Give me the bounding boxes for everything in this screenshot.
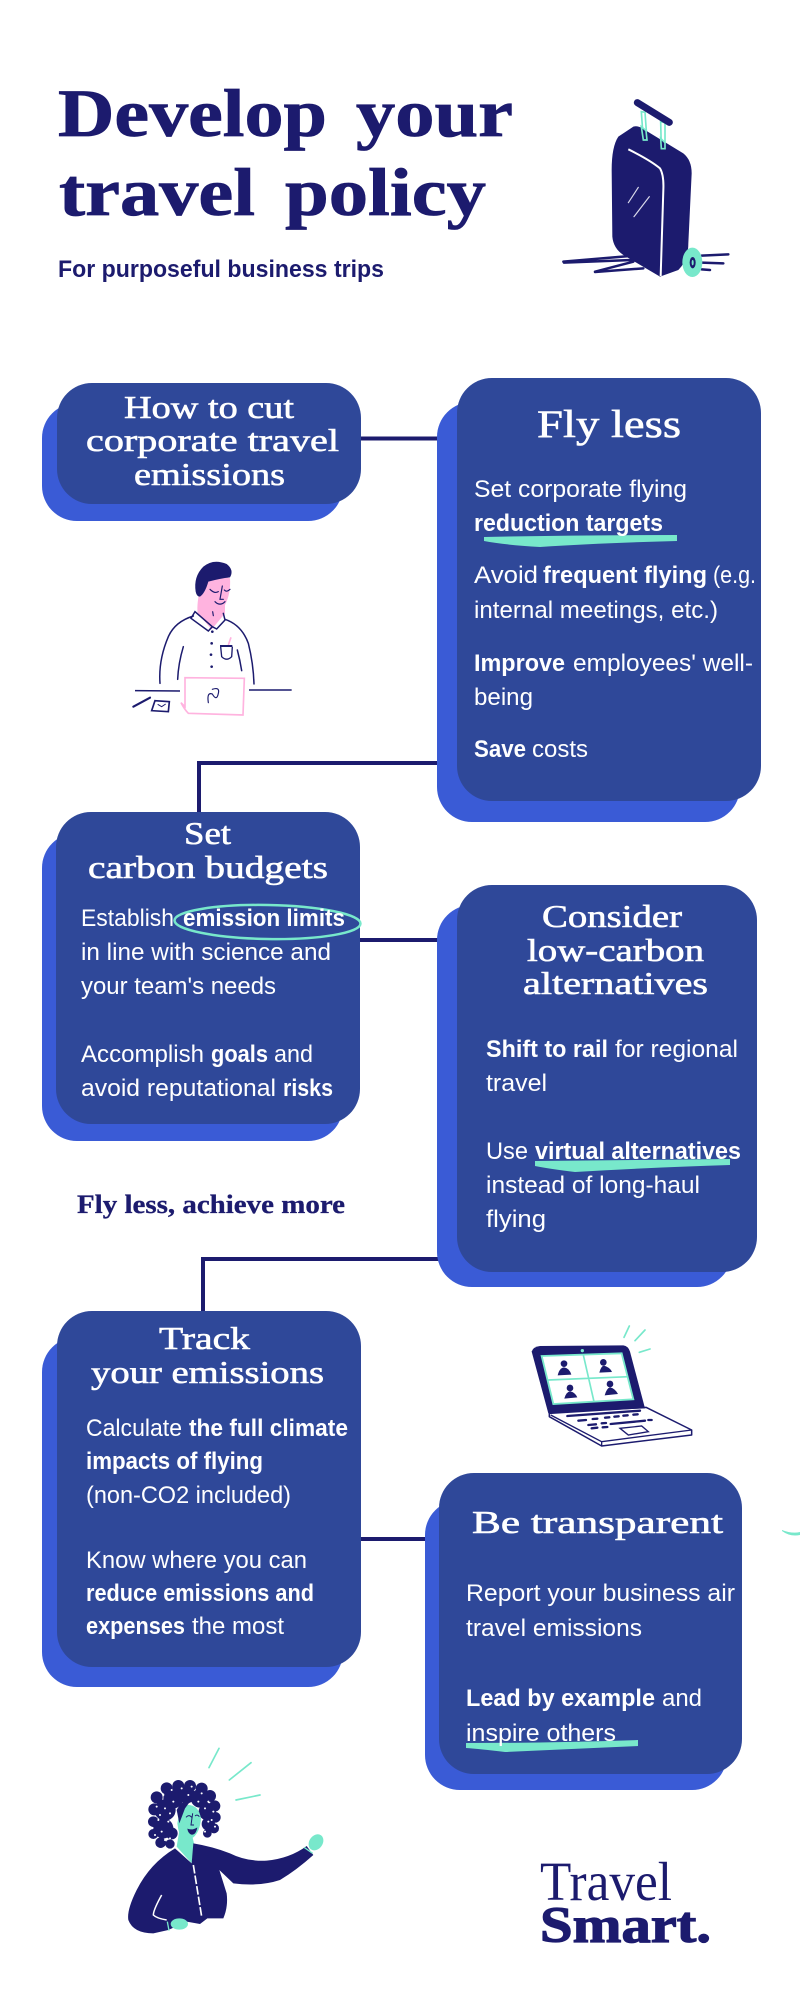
body text: track emissions: reduce emissions and [86,1580,314,1607]
body text: fly less: (e.g. [713,562,756,589]
icon: suitcase [563,103,728,277]
body text: alternatives: Use [486,1138,528,1165]
body text: carbon budgets: Establish [81,905,174,932]
body text: fly less [474,476,756,763]
connector: fly less to carbon budgets [199,763,440,815]
tagline: Fly less, achieve more [77,1190,345,1219]
body text: carbon budgets [81,905,345,1102]
panel: fly less [437,378,761,822]
heading: set carbon budgets: Set [184,815,231,851]
body text: alternatives: flying [486,1206,546,1233]
logo: Travel Smart: Smart. [540,1898,711,1954]
body text: track emissions: the full climate [189,1415,348,1442]
body text: carbon budgets: Accomplish [81,1041,204,1068]
subtitle: For purposeful business trips [58,256,384,283]
heading: how to cut corporate travel emissions [86,389,339,492]
body text: carbon budgets: risks [283,1075,333,1102]
illustration: woman waving [128,1748,326,1933]
title: policy [285,154,486,230]
body text: carbon budgets: in line with science and [81,939,331,966]
body text: track emissions: impacts of flying [86,1448,263,1475]
illustration: man at laptop [133,562,292,715]
logo: Travel Smart [540,1851,711,1954]
body text: fly less: employees' well- [573,650,753,677]
body text: fly less: Improve [474,650,565,677]
body text: be transparent: travel emissions [466,1615,642,1642]
highlight: reduction targets underline [484,535,677,547]
connector: track emissions to be transparent [359,1537,428,1541]
heading: consider low-carbon alternatives [523,898,708,1001]
body text: track emissions: Calculate [86,1415,182,1442]
heading: set carbon budgets [88,815,328,885]
body text: alternatives: travel [486,1070,547,1097]
body text: carbon budgets: emission limits [183,905,345,932]
heading: track your emissions [91,1320,324,1390]
logo: Travel Smart: Travel [540,1851,672,1912]
panel: set carbon budgets [42,812,361,1141]
heading: how to cut corporate travel emissions: corporate travel [86,422,339,458]
highlight: emission limits circle [174,903,361,941]
heading: track your emissions: your emissions [91,1354,324,1390]
heading: consider low-carbon alternatives: Consider [542,898,682,934]
body text: be transparent: Report your business air [466,1580,735,1607]
body text: track emissions [86,1415,348,1640]
body text: track emissions: (non-CO2 included) [86,1482,291,1509]
body text: fly less: reduction targets [474,510,663,537]
highlight: virtual alternatives underline [535,1159,730,1172]
body text: alternatives [486,1036,741,1233]
heading: be transparent: Be transparent [472,1504,723,1540]
body text: fly less: frequent flying [543,562,707,589]
body text: carbon budgets: goals [211,1041,268,1068]
connector: intro to fly less [361,436,440,440]
body text: be transparent: inspire others [466,1720,616,1747]
connector: carbon budgets to alternatives [358,938,440,942]
heading: how to cut corporate travel emissions: How to cut [124,389,294,425]
body text: fly less: Avoid [474,562,538,589]
illustration: laptop video call [532,1326,692,1446]
body text: be transparent: Lead by example [466,1685,655,1712]
heading: fly less: Fly less [537,403,681,446]
body text: be transparent: and [662,1685,702,1712]
title [58,75,513,230]
body text: be transparent [466,1580,735,1747]
body text: fly less: Set corporate flying [474,476,687,503]
body text: carbon budgets: avoid reputational [81,1075,276,1102]
body text: alternatives: for regional [615,1036,738,1063]
title: your [356,75,513,151]
panel: track your emissions [42,1311,361,1687]
body text: carbon budgets: and [274,1041,313,1068]
title: travel [59,154,255,230]
body text: fly less: costs [532,736,588,763]
body text: track emissions: Know where you can [86,1547,307,1574]
highlight: inspire others underline [466,1740,638,1752]
heading: consider low-carbon alternatives: low-carbon [527,932,704,968]
heading: set carbon budgets: carbon budgets [88,849,328,885]
heading: track your emissions: Track [159,1320,250,1356]
panel: be transparent [425,1473,742,1790]
body text: track emissions: expenses [86,1613,185,1640]
body text: track emissions: the most [192,1613,284,1640]
body text: alternatives: instead of long-haul [486,1172,700,1199]
title: Develop [58,75,327,151]
body text: fly less: being [474,684,533,711]
body text: alternatives: Shift to rail [486,1036,608,1063]
body text: alternatives: virtual alternatives [535,1138,741,1165]
panel: how to cut emissions [42,383,361,521]
body text: fly less: internal meetings, etc.) [474,597,718,624]
panel: consider low-carbon alternatives [437,885,757,1287]
decorative teal brush fragment at the right edge [782,1530,800,1536]
body text: carbon budgets: your team's needs [81,973,276,1000]
heading: how to cut corporate travel emissions: emissions [134,456,285,492]
body text: fly less: Save [474,736,526,763]
connector: alternatives to track emissions [203,1259,440,1314]
heading: consider low-carbon alternatives: alternatives [523,965,708,1001]
